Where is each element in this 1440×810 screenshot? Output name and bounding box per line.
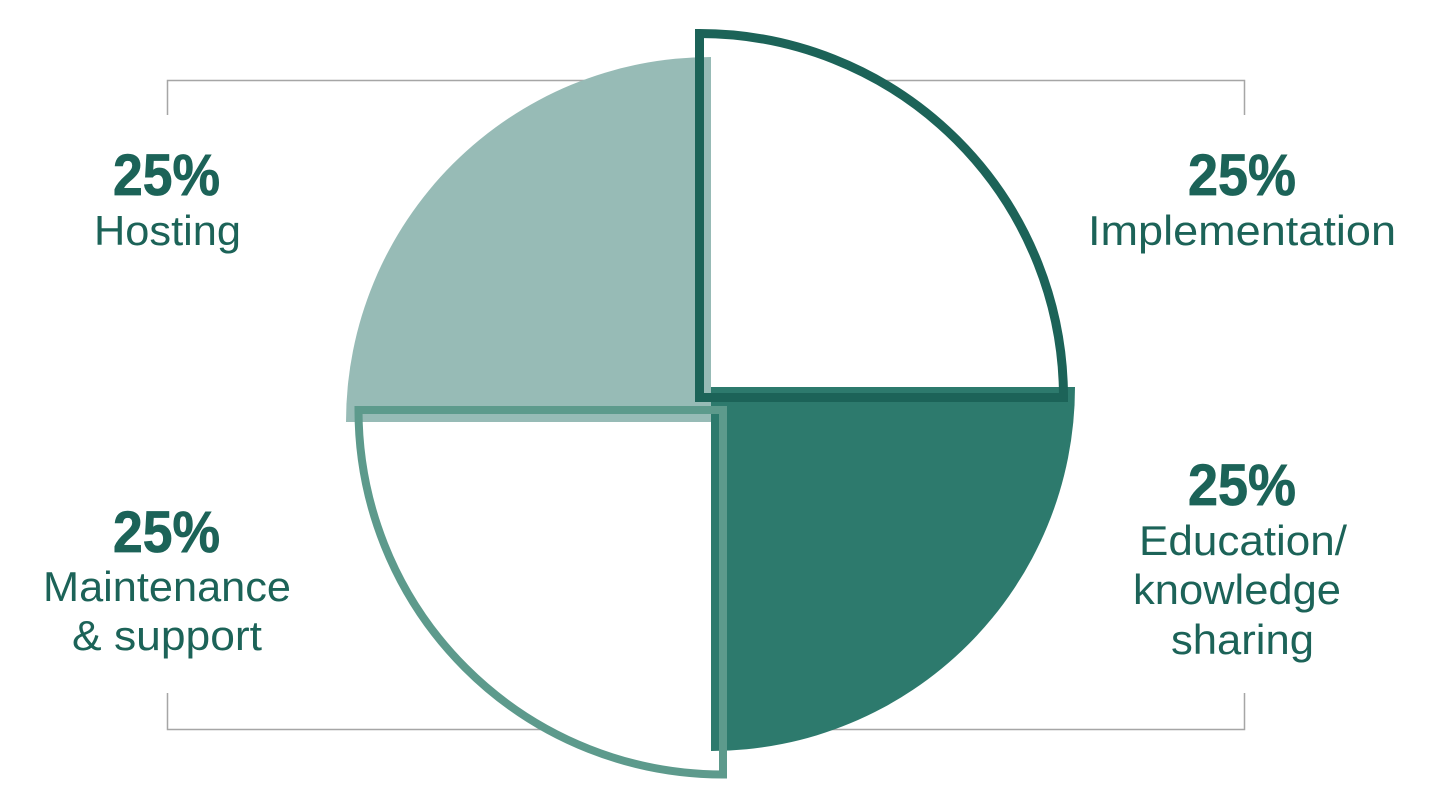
label: implementation: 25%: [1188, 143, 1296, 208]
leader line: education: [825, 693, 1244, 730]
label: maintenance and support: 25%: [113, 500, 220, 565]
leader line: maintenance and support: [168, 693, 549, 730]
label: maintenance and support: Maintenance: [43, 563, 291, 610]
label: education and knowledge sharing: Education/: [1139, 517, 1347, 564]
leader line: hosting: [168, 80, 590, 115]
label: hosting: 25%: [113, 143, 220, 208]
label: maintenance and support: & support: [72, 612, 262, 659]
pie slice outline: maintenance and support: [358, 410, 723, 774]
pie slice: hosting: [346, 57, 711, 422]
leader line: implementation: [875, 80, 1244, 115]
label: implementation: Implementation: [1088, 207, 1396, 254]
pie slice: education: [711, 387, 1075, 751]
label: education and knowledge sharing: knowledge: [1133, 566, 1341, 613]
label: maintenance and support: [43, 500, 291, 659]
label: education and knowledge sharing: sharing: [1171, 616, 1314, 663]
label: hosting: Hosting: [94, 207, 241, 254]
label: education and knowledge sharing: 25%: [1188, 453, 1296, 518]
label: education and knowledge sharing: [1133, 453, 1347, 663]
pie slice outline: implementation: [700, 34, 1064, 398]
label: implementation: [1088, 143, 1396, 254]
label: hosting: [94, 143, 241, 254]
